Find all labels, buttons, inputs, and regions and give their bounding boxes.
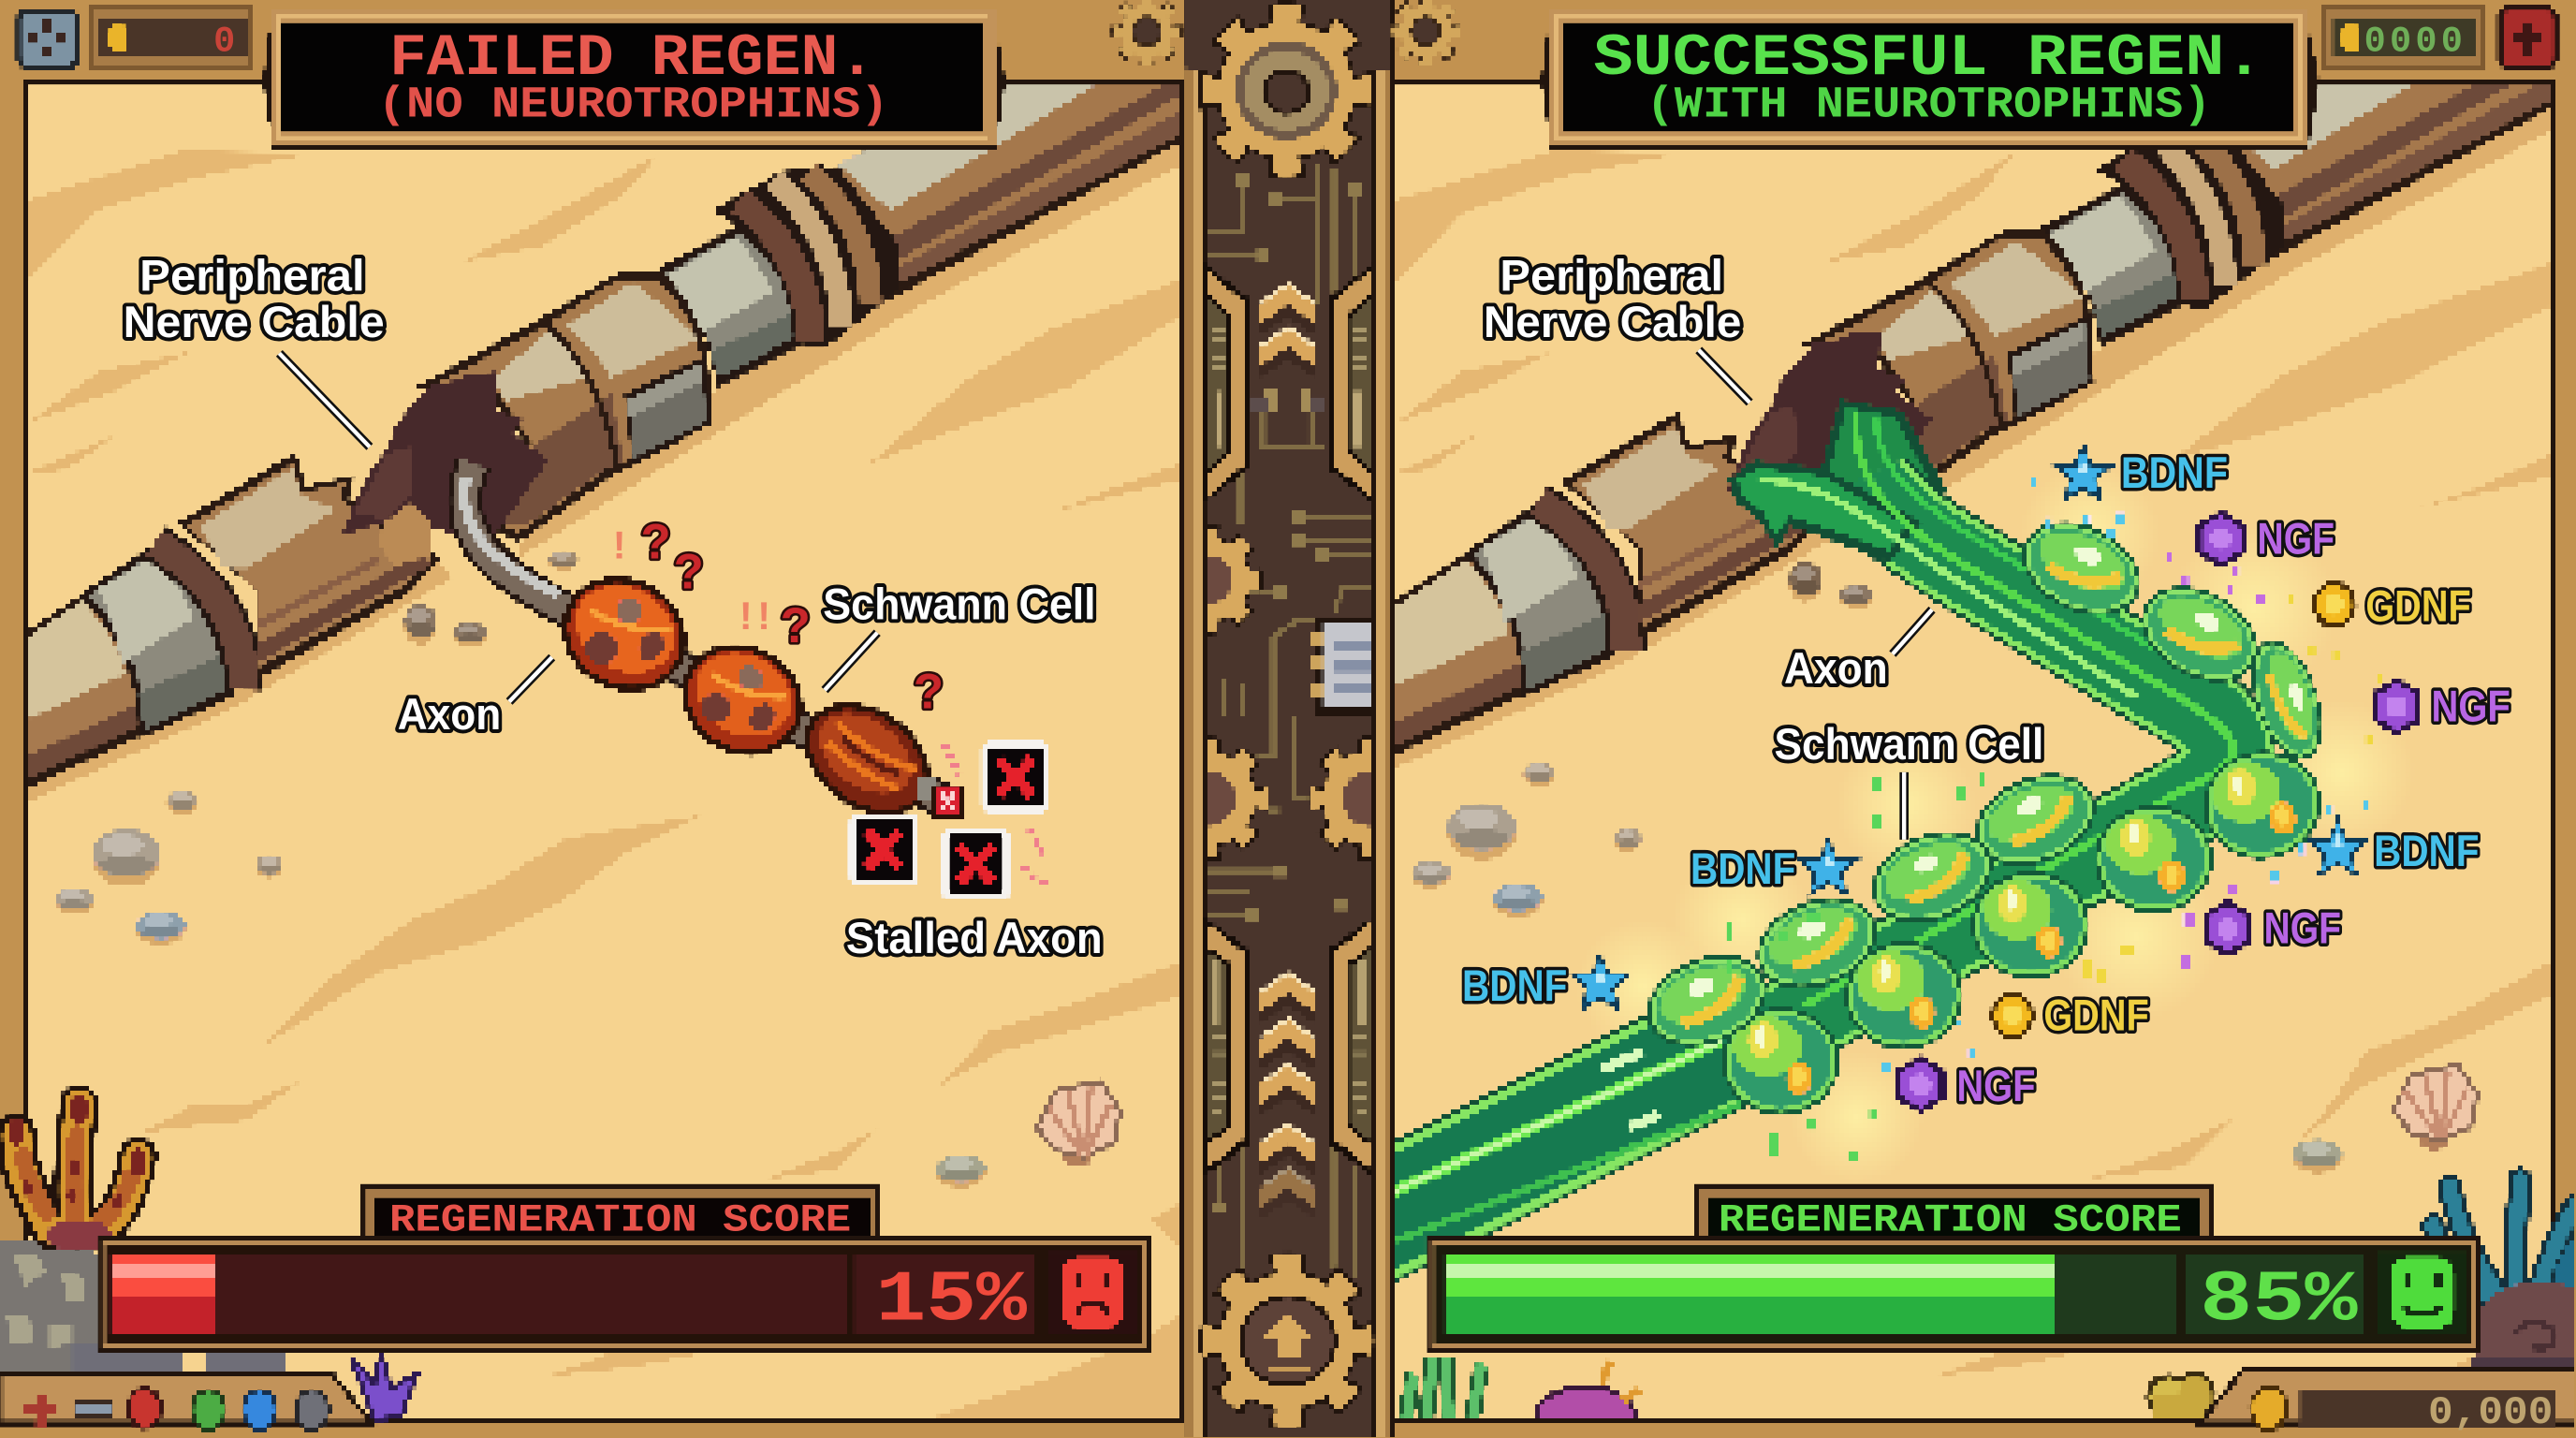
coin count left: 0 (213, 21, 235, 62)
growth factor labels: BDNF (1690, 844, 1795, 894)
schwann cells outer row (1721, 741, 2330, 1116)
label: stalled axon: Stalled Axon (846, 914, 1103, 963)
growth factor particles (1725, 477, 2384, 1160)
bottom gear with up arrow (1212, 1265, 1364, 1416)
bottom counter value: 0,000 (2428, 1390, 2553, 1435)
hud coin counter right (2323, 7, 2484, 69)
hud bottom-left inventory strip (0, 1373, 372, 1430)
regenerated green axon (1347, 399, 2233, 1240)
ngf hex 2 (2372, 677, 2422, 736)
hud red menu icon right (2497, 7, 2558, 69)
leader: schwann cell (825, 633, 877, 690)
title: failed regen: FAILED REGEN. (389, 24, 875, 92)
leader: axon (509, 657, 552, 701)
gdnf coin 1 (2312, 580, 2357, 628)
shell left (1036, 1081, 1120, 1167)
score bar frame right (1427, 1238, 2479, 1349)
fading chevron gate (1251, 388, 1325, 411)
label: peripheral nerve cable right: Nerve Cable (1484, 298, 1741, 347)
upper bracket right (1327, 263, 1373, 503)
successful panel artwork (1347, 0, 2576, 1438)
percent box left (855, 1254, 1033, 1334)
confusion marks: ! (613, 523, 626, 567)
upward chevrons upper (1260, 283, 1314, 378)
small gear right (1398, 4, 1454, 59)
panel: failed regeneration (0, 0, 1298, 1430)
regeneration score tab right (1697, 1184, 2210, 1244)
schwann cells inner row (1633, 757, 2110, 1064)
label: peripheral nerve cable: Peripheral (139, 252, 365, 301)
peripheral nerve cable right lower segment (1351, 411, 1835, 788)
schwann cell orange 1 (562, 576, 688, 693)
schwann cell damaged (805, 702, 931, 814)
label: axon: Axon (398, 690, 501, 740)
stalled axon tube (464, 463, 944, 801)
happy face (2378, 1252, 2467, 1334)
side half gears (1154, 533, 1423, 851)
confusion marks: ? (640, 515, 671, 570)
side chip (1311, 616, 1370, 714)
lower bracket right (1327, 917, 1373, 1177)
lower bracket left (1204, 917, 1251, 1177)
score tab label left: REGENERATION SCORE (389, 1198, 851, 1243)
score bar frame left (98, 1238, 1150, 1349)
confusion marks: ? (914, 664, 944, 719)
panel outline right (1393, 84, 2553, 1421)
magenta urchin (1536, 1360, 1640, 1438)
yellow coral (2145, 1372, 2217, 1419)
gdnf coin 2 (1990, 991, 2035, 1039)
score bar right 85 percent (1444, 1254, 2175, 1334)
score tab label right: REGENERATION SCORE (1719, 1198, 2182, 1243)
spiral shell creature (2471, 1282, 2576, 1387)
title: successful regen (1593, 24, 2264, 131)
blocked marker 1 (984, 744, 1046, 810)
debris pebbles right (1789, 562, 1873, 609)
label: peripheral nerve cable right (1484, 252, 1741, 347)
score bar left 15 percent (110, 1254, 846, 1334)
score value left: 15% (875, 1260, 1028, 1342)
divider pillars (1183, 0, 1397, 1438)
leader: nerve cable (279, 353, 370, 447)
growth factor labels: BDNF (2121, 448, 2228, 498)
confusion marks: ? (674, 544, 704, 599)
growth factor labels: NGF (2264, 903, 2341, 953)
growth factor labels: NGF (2258, 514, 2334, 564)
hud coin counter left (91, 7, 252, 69)
label: peripheral nerve cable: Nerve Cable (124, 298, 385, 347)
upper bracket left (1204, 263, 1251, 503)
peripheral nerve cable right upper segment (1725, 0, 2576, 526)
leader: schwann cell right (1901, 772, 1907, 840)
circuit traces (1208, 165, 1370, 1278)
hud bottom-right counter strip (2200, 1369, 2576, 1430)
rock left (0, 1240, 285, 1373)
coral left (17, 1103, 138, 1236)
blue coral (2433, 1180, 2576, 1314)
score value right: 85% (2200, 1260, 2358, 1342)
leader: axon right (1893, 609, 1932, 654)
label: schwann cell: Schwann Cell (823, 580, 1096, 630)
failed panel text (124, 21, 1103, 1342)
panel outline left (24, 84, 1183, 1421)
panel: centre divider column (1119, 0, 1454, 1438)
growth factor labels (1462, 448, 2510, 1111)
top gear (1211, 15, 1362, 166)
growth factor labels: NGF (2432, 682, 2510, 731)
panel: successful regeneration (1347, 0, 2576, 1438)
blocked marker 2 (853, 816, 915, 882)
blocked marker 3 (944, 831, 1007, 897)
upward chevrons lower (1260, 971, 1314, 1219)
regeneration score tab left (365, 1184, 877, 1244)
confusion marks: ? (781, 598, 811, 653)
shell right (2393, 1064, 2478, 1151)
purple coral (350, 1351, 417, 1419)
bdnf star 1 (2050, 440, 2116, 503)
debris pebbles near break (404, 550, 578, 646)
growth factor labels: BDNF (2374, 827, 2479, 876)
title frame left (263, 8, 1005, 148)
stalled axon tip (916, 775, 962, 818)
peripheral nerve cable left upper segment (342, 84, 1179, 566)
schwann cells upper arc (2007, 504, 2335, 769)
leader: nerve cable right (1699, 350, 1749, 403)
schwann cell orange 2 (683, 646, 805, 758)
successful panel text (1462, 21, 2553, 1435)
growth factor labels: GDNF (2043, 990, 2149, 1040)
growth factor labels: GDNF (2365, 581, 2471, 631)
title frame right (1541, 8, 2320, 148)
ngf hex 3 (2203, 899, 2252, 958)
sparks (943, 742, 1048, 888)
peripheral nerve cable left lower segment (28, 454, 449, 800)
small gear left (1119, 4, 1175, 59)
label: peripheral nerve cable (124, 252, 385, 347)
sand arena right (1347, 0, 2576, 1438)
growth factor labels: NGF (1956, 1062, 2036, 1111)
hud menu icon left (17, 8, 79, 69)
label: axon right: Axon (1784, 644, 1888, 694)
bdnf star 2 (2305, 815, 2371, 877)
sand arena left (28, 84, 1179, 1418)
failed panel artwork (0, 0, 1298, 1430)
title: successful regen: SUCCESSFUL REGEN. (1593, 24, 2264, 92)
title: failed regen (378, 24, 889, 131)
confusion marks: ! (757, 594, 770, 638)
seaweed (1406, 1357, 1482, 1419)
glow around cells (1577, 465, 2413, 1183)
ngf hex 4 (1895, 1055, 1945, 1114)
ngf hex 1 (2197, 509, 2246, 568)
label: schwann cell right: Schwann Cell (1775, 720, 2043, 770)
pebbles left (54, 790, 986, 1188)
bdnf star 3 (1795, 835, 1862, 897)
sad face (1050, 1252, 1137, 1334)
bdnf star 4 (1567, 949, 1633, 1012)
coin count right: 0000 (2364, 21, 2463, 62)
title: successful regen: (WITH NEUROTROPHINS) (1647, 81, 2211, 131)
pebbles right (1412, 762, 2343, 1173)
percent box right (2185, 1254, 2364, 1334)
label: peripheral nerve cable right: Peripheral (1500, 252, 1723, 301)
growth factor labels: BDNF (1462, 961, 1567, 1011)
confusion marks: ! (739, 594, 753, 638)
title: failed regen: (NO NEUROTROPHINS) (378, 81, 889, 131)
confusion marks (613, 515, 944, 719)
